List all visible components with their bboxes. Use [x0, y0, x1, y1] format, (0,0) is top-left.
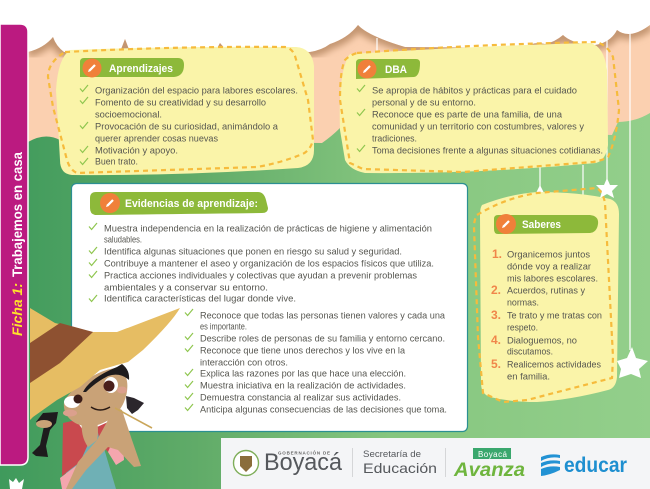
checklist: second column	[185, 309, 447, 416]
checklist: Organización del espacio para labores escolares.	[95, 86, 298, 96]
arms and hands	[66, 405, 141, 489]
checklist: second column: Describe roles de personas de su familia y entorno cercano.	[200, 334, 445, 344]
checklist: Buen trato.	[95, 156, 138, 168]
hanging strings	[377, 0, 630, 350]
eye right	[104, 377, 118, 393]
icon: star upper right	[596, 178, 618, 198]
logo: Boyacá Avanza: Boyacá	[478, 450, 508, 459]
logo: Boyacá: Boyacá	[264, 449, 343, 476]
checklist	[357, 85, 603, 156]
logo: Secretaría de Educación: Secretaría de	[363, 449, 421, 460]
checklist: second column: interacción con otros.	[200, 358, 288, 368]
numbered list	[491, 247, 602, 382]
checklist: Fomento de su creatividad y su desarrollo	[95, 98, 266, 108]
straw	[115, 408, 152, 428]
checklist: second column: Muestra iniciativa en la realización de actividades.	[200, 380, 406, 392]
checklist: second column: Demuestra constancia al realizar sus actividades.	[200, 392, 401, 404]
logo: Boyacá Avanza	[453, 448, 525, 481]
checklist: Provocación de su curiosidad, animándolo a	[95, 122, 279, 132]
checklist: comunidad y un territorio con costumbres, valores y	[372, 122, 584, 132]
checklist: socioemocional.	[95, 110, 162, 120]
hair	[83, 364, 129, 392]
icon: small star bottom	[9, 478, 24, 489]
logo: Boyacá	[234, 448, 343, 476]
checklist: second column: Anticipa algunas consecuencias de las decisiones que toma.	[200, 404, 447, 416]
numbered list: normas.	[507, 298, 539, 308]
logo: Secretaría de Educación: Educación	[363, 460, 437, 476]
heading: Saberes	[522, 219, 561, 231]
logo: Secretaría de Educación	[363, 449, 437, 476]
numbered list: 2.	[491, 283, 501, 297]
checklist: querer aprender cosas nuevas	[95, 134, 218, 144]
tab title: Ficha 1:	[9, 283, 25, 336]
icon: star on string	[536, 185, 544, 193]
overalls	[62, 428, 116, 489]
face	[64, 368, 127, 426]
checklist: second column: Reconoce que todas las personas tienen valores y cada una	[200, 310, 446, 322]
checklist: first column: Identifica algunas situaciones que ponen en riesgo su salud y seguridad.	[104, 246, 402, 258]
checklist: second column: Reconoce que tiene unos derechos y los vive en la	[200, 346, 406, 356]
numbered list: discutamos.	[507, 346, 553, 358]
panel: saberes	[474, 188, 619, 402]
cheek right	[117, 386, 127, 394]
numbered list: 1.	[492, 247, 502, 261]
left braid	[32, 412, 58, 457]
shirt	[62, 420, 118, 476]
logo: educar: educar	[564, 454, 627, 477]
numbered list: 3.	[491, 308, 501, 322]
icon: large star	[617, 347, 648, 378]
checklist: Toma decisiones frente a algunas situaciones cotidianas.	[372, 146, 603, 156]
checklist: second column: Explica las razones por las que hace una elección.	[200, 368, 406, 380]
checklist: Motivación y apoyo.	[95, 146, 178, 156]
numbered list: 5.	[491, 357, 501, 371]
tab title	[9, 152, 25, 336]
panel: aprendizajes	[48, 47, 314, 175]
clouds	[28, 20, 650, 150]
checklist: first column: Muestra independencia en la realización de prácticas de higiene y alimentación	[104, 224, 432, 234]
hand under chin	[82, 414, 98, 447]
numbered list: 4.	[491, 333, 501, 347]
numbered list: Organicemos juntos	[507, 250, 590, 260]
numbered list: Realicemos actividades	[507, 360, 601, 370]
checklist: second column: es importante.	[200, 322, 247, 332]
checklist: Se apropia de hábitos y prácticas para el cuidado	[372, 86, 577, 96]
checklist: Reconoce que es parte de una familia, de una	[372, 110, 563, 120]
cheeks	[63, 410, 77, 416]
hat brim	[30, 308, 180, 420]
numbered list: Acuerdos, rutinas y	[507, 286, 585, 296]
checklist: first column	[89, 223, 434, 304]
checklist: first column: Practica acciones individuales y colectivas que ayudan a prevenir problemas	[104, 270, 417, 282]
mouth	[91, 407, 110, 410]
checklist: first column: saludables.	[104, 234, 142, 246]
heading: Aprendizajes	[109, 63, 173, 75]
heading	[494, 214, 598, 234]
checklist: tradiciones.	[372, 134, 417, 144]
numbered list: Dialoguemos, no	[507, 336, 577, 346]
ear	[36, 420, 52, 428]
numbered list: dónde voy a realizar	[507, 262, 592, 272]
side tab	[0, 24, 28, 465]
logo: Boyacá Avanza: Avanza	[453, 459, 525, 481]
hat band	[30, 323, 93, 383]
heading	[356, 59, 420, 79]
right pigtail	[126, 396, 144, 414]
heading	[90, 192, 268, 215]
heading	[80, 58, 184, 78]
character: girl with straw hat	[30, 308, 180, 489]
numbered list: respeto.	[507, 322, 538, 334]
panel: evidencias de aprendizaje	[72, 184, 468, 432]
cuffs	[60, 440, 124, 489]
footer logos	[221, 438, 650, 489]
checklist: personal y de su entorno.	[372, 98, 476, 108]
green background	[0, 100, 650, 489]
tab title: Trabajemos en casa	[9, 152, 25, 277]
logo: Boyacá: GOBERNACIÓN DE	[278, 448, 330, 456]
panel: DBA	[340, 42, 619, 173]
checklist: first column: ambientales y a conservar su entorno.	[104, 282, 268, 294]
numbered list: en familia.	[507, 372, 550, 382]
heading: DBA	[385, 64, 407, 76]
numbered list: Te trato y me tratas con	[507, 310, 602, 322]
checklist: first column: Identifica características del lugar donde vive.	[104, 294, 296, 304]
numbered list: mis labores escolares.	[507, 274, 598, 284]
checklist: first column: Contribuye a mantener el aseo y organización de los espacios físicos que utiliza.	[104, 258, 434, 270]
logo: educar	[541, 454, 627, 477]
checklist	[80, 85, 298, 168]
heading: Evidencias de aprendizaje:	[125, 198, 258, 210]
eye left	[64, 394, 82, 408]
